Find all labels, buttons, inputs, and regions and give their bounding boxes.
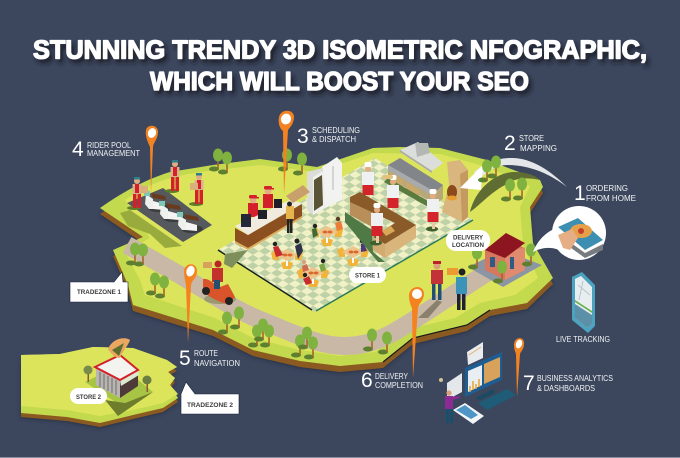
callout: tradezone 1: TRADEZONE 1 — [77, 289, 121, 296]
pill: store 2: STORE 2 — [76, 394, 101, 401]
dining tables — [271, 217, 369, 287]
pill: store 1: STORE 1 — [355, 272, 380, 280]
staff — [248, 195, 259, 217]
person — [445, 390, 460, 423]
title: WHICH WILL BOOST YOUR SEO — [150, 68, 529, 96]
keyboard — [478, 389, 516, 410]
machines — [241, 214, 251, 227]
stove floor shadow — [384, 178, 435, 208]
stoves — [388, 165, 443, 204]
store 2 island — [21, 338, 178, 428]
label 2: MAPPING — [520, 144, 557, 153]
phone — [453, 403, 484, 424]
pin 4 — [146, 126, 158, 195]
callout: tradezone 2: TRADEZONE 2 — [187, 402, 233, 409]
walls — [96, 368, 120, 398]
dashboard — [439, 342, 516, 424]
title: STUNNING TRENDY 3D ISOMETRIC NFOGRAPHIC, — [33, 36, 647, 64]
pill: store 2 — [70, 388, 107, 404]
label 1: FROM HOME — [586, 194, 636, 203]
label 5: 5 — [179, 347, 191, 370]
roof — [95, 355, 138, 380]
pin 3 — [279, 111, 294, 195]
stand — [475, 389, 495, 400]
diners — [273, 246, 283, 257]
label 7: 7 — [523, 372, 535, 395]
pill: delivery location: DELIVERY — [453, 234, 484, 242]
kitchen — [345, 142, 468, 262]
hood — [400, 142, 443, 171]
label 1: 1 — [574, 182, 586, 205]
label 3 — [297, 125, 360, 148]
label 5: NAVIGATION — [194, 359, 240, 368]
fridges — [307, 157, 342, 215]
label 3: & DISPATCH — [312, 135, 356, 144]
label 2: 2 — [504, 132, 516, 155]
label: live tracking: LIVE TRACKING — [556, 335, 610, 344]
label 1: ORDERING — [586, 184, 628, 193]
label 3: SCHEDULING — [312, 126, 360, 135]
callout: tradezone 1 — [70, 272, 128, 302]
base — [85, 365, 153, 405]
scooters — [144, 191, 203, 233]
label 7 — [523, 372, 613, 395]
back chefs — [361, 162, 374, 204]
trees — [126, 148, 527, 360]
label 4: MANAGEMENT — [87, 149, 140, 158]
label 2: STORE — [519, 134, 544, 143]
platform — [127, 188, 212, 242]
customer — [286, 202, 294, 233]
counter — [235, 204, 302, 248]
counter shadow — [224, 250, 248, 268]
label 5 — [179, 347, 240, 370]
label 6 — [361, 369, 423, 392]
label 1 — [574, 182, 636, 205]
label 2 — [504, 132, 557, 155]
label 5: ROUTE — [194, 349, 218, 358]
oven — [442, 160, 468, 222]
pin 5 — [184, 264, 197, 343]
kitchen counter — [350, 198, 372, 227]
pill: store 1 — [349, 267, 386, 283]
rider pool — [120, 160, 212, 248]
delivery people — [418, 261, 467, 318]
boxes — [286, 185, 310, 203]
road — [127, 245, 488, 346]
label 6: DELIVERY — [375, 372, 409, 381]
trees — [84, 366, 92, 382]
label 6: 6 — [361, 369, 373, 392]
main island — [100, 147, 553, 373]
label 4 — [72, 138, 140, 161]
front chefs — [370, 203, 383, 246]
monitor — [465, 352, 502, 397]
bubble: ordering from home — [533, 206, 606, 260]
curved arrow — [460, 158, 567, 212]
pin 7 — [514, 338, 524, 397]
scooter rider — [202, 260, 236, 305]
store floor — [218, 158, 473, 312]
pill: delivery location — [446, 230, 490, 251]
pill: delivery location: LOCATION — [452, 242, 484, 249]
pin 6 — [409, 287, 424, 378]
phone: live tracking — [572, 272, 595, 333]
label 7: BUSINESS ANALYTICS — [537, 374, 613, 383]
cashier counter — [224, 185, 310, 268]
callout: tradezone 2 — [181, 382, 239, 414]
platform shadow — [120, 210, 182, 248]
label 3: 3 — [297, 125, 309, 148]
title — [33, 36, 647, 96]
label 7: & DASHBOARDS — [537, 384, 595, 393]
pizza sign — [108, 338, 130, 358]
left panel — [447, 373, 462, 400]
chart panel — [467, 342, 483, 365]
counter shadow — [345, 212, 385, 262]
house — [468, 233, 542, 287]
store 2 building — [84, 338, 153, 416]
label 4: RIDER POOL — [87, 141, 131, 150]
label 4: 4 — [72, 138, 84, 161]
riders — [127, 160, 204, 210]
label 6: COMPLETION — [375, 381, 423, 390]
